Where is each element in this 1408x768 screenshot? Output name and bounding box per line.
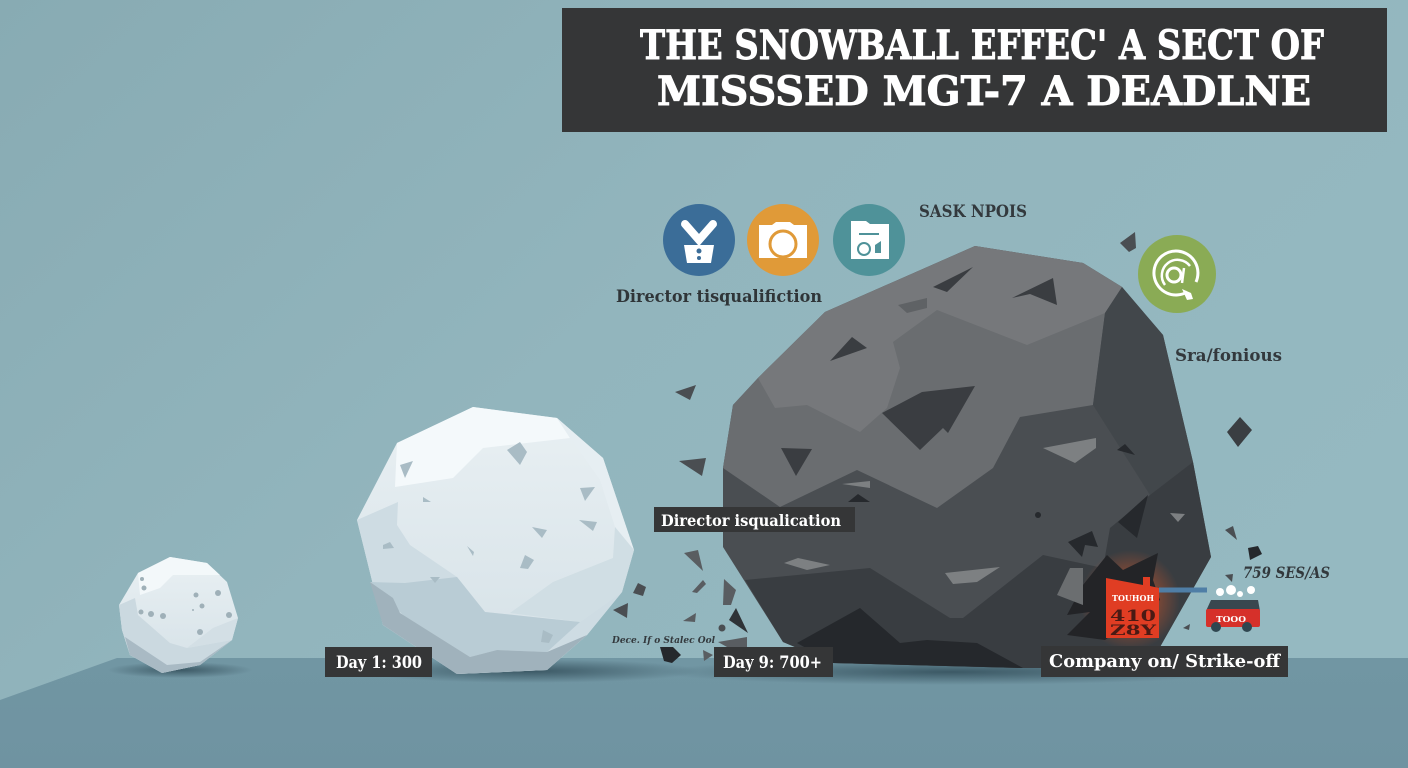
icon: red notice building: Z8Y xyxy=(1110,623,1158,639)
callout: day 1 xyxy=(325,647,432,677)
small snowball xyxy=(108,557,252,678)
title banner xyxy=(562,8,1387,132)
small debris caption: Dece. If o Stalec Ool xyxy=(611,635,715,646)
ground xyxy=(0,658,1408,768)
callout: company strike-off: Company on/ Strike-off xyxy=(1049,651,1281,672)
callout: day 1: Day 1: 300 xyxy=(336,653,422,672)
callout: day 9: Day 9: 700+ xyxy=(723,653,822,672)
label: director disqualification: Director tisqualifiction xyxy=(616,287,822,307)
icon: red van xyxy=(1206,585,1260,632)
icon: red notice building xyxy=(1057,550,1180,650)
label: sask apois: SASK NPOIS xyxy=(919,202,1027,221)
icon: red van: TOOO xyxy=(1216,614,1246,624)
callout: company strike-off xyxy=(1041,646,1288,677)
label: sra/fonious: Sra/fonious xyxy=(1175,346,1282,365)
title banner: MISSSED MGT-7 A DEADLNE xyxy=(657,68,1311,115)
boulder xyxy=(660,246,1240,685)
icon: red notice building: TOUHOH xyxy=(1112,593,1154,603)
icon: blue badge xyxy=(663,204,735,276)
callout: day 9 xyxy=(714,647,833,677)
debris fragments xyxy=(613,232,1262,663)
connector chain xyxy=(1159,588,1207,592)
icon: green at sign xyxy=(1138,235,1216,313)
large snowball xyxy=(357,407,700,683)
label: 759 ses/as: 759 SES/AS xyxy=(1243,563,1330,582)
callout: director disqualification: Director isqualication xyxy=(661,511,841,530)
snowball pits xyxy=(383,442,597,643)
icon: teal folder xyxy=(833,204,905,276)
icon: orange camera xyxy=(747,204,819,276)
icon: red notice building: 410 xyxy=(1110,606,1156,625)
boulder cracks xyxy=(781,267,1057,476)
